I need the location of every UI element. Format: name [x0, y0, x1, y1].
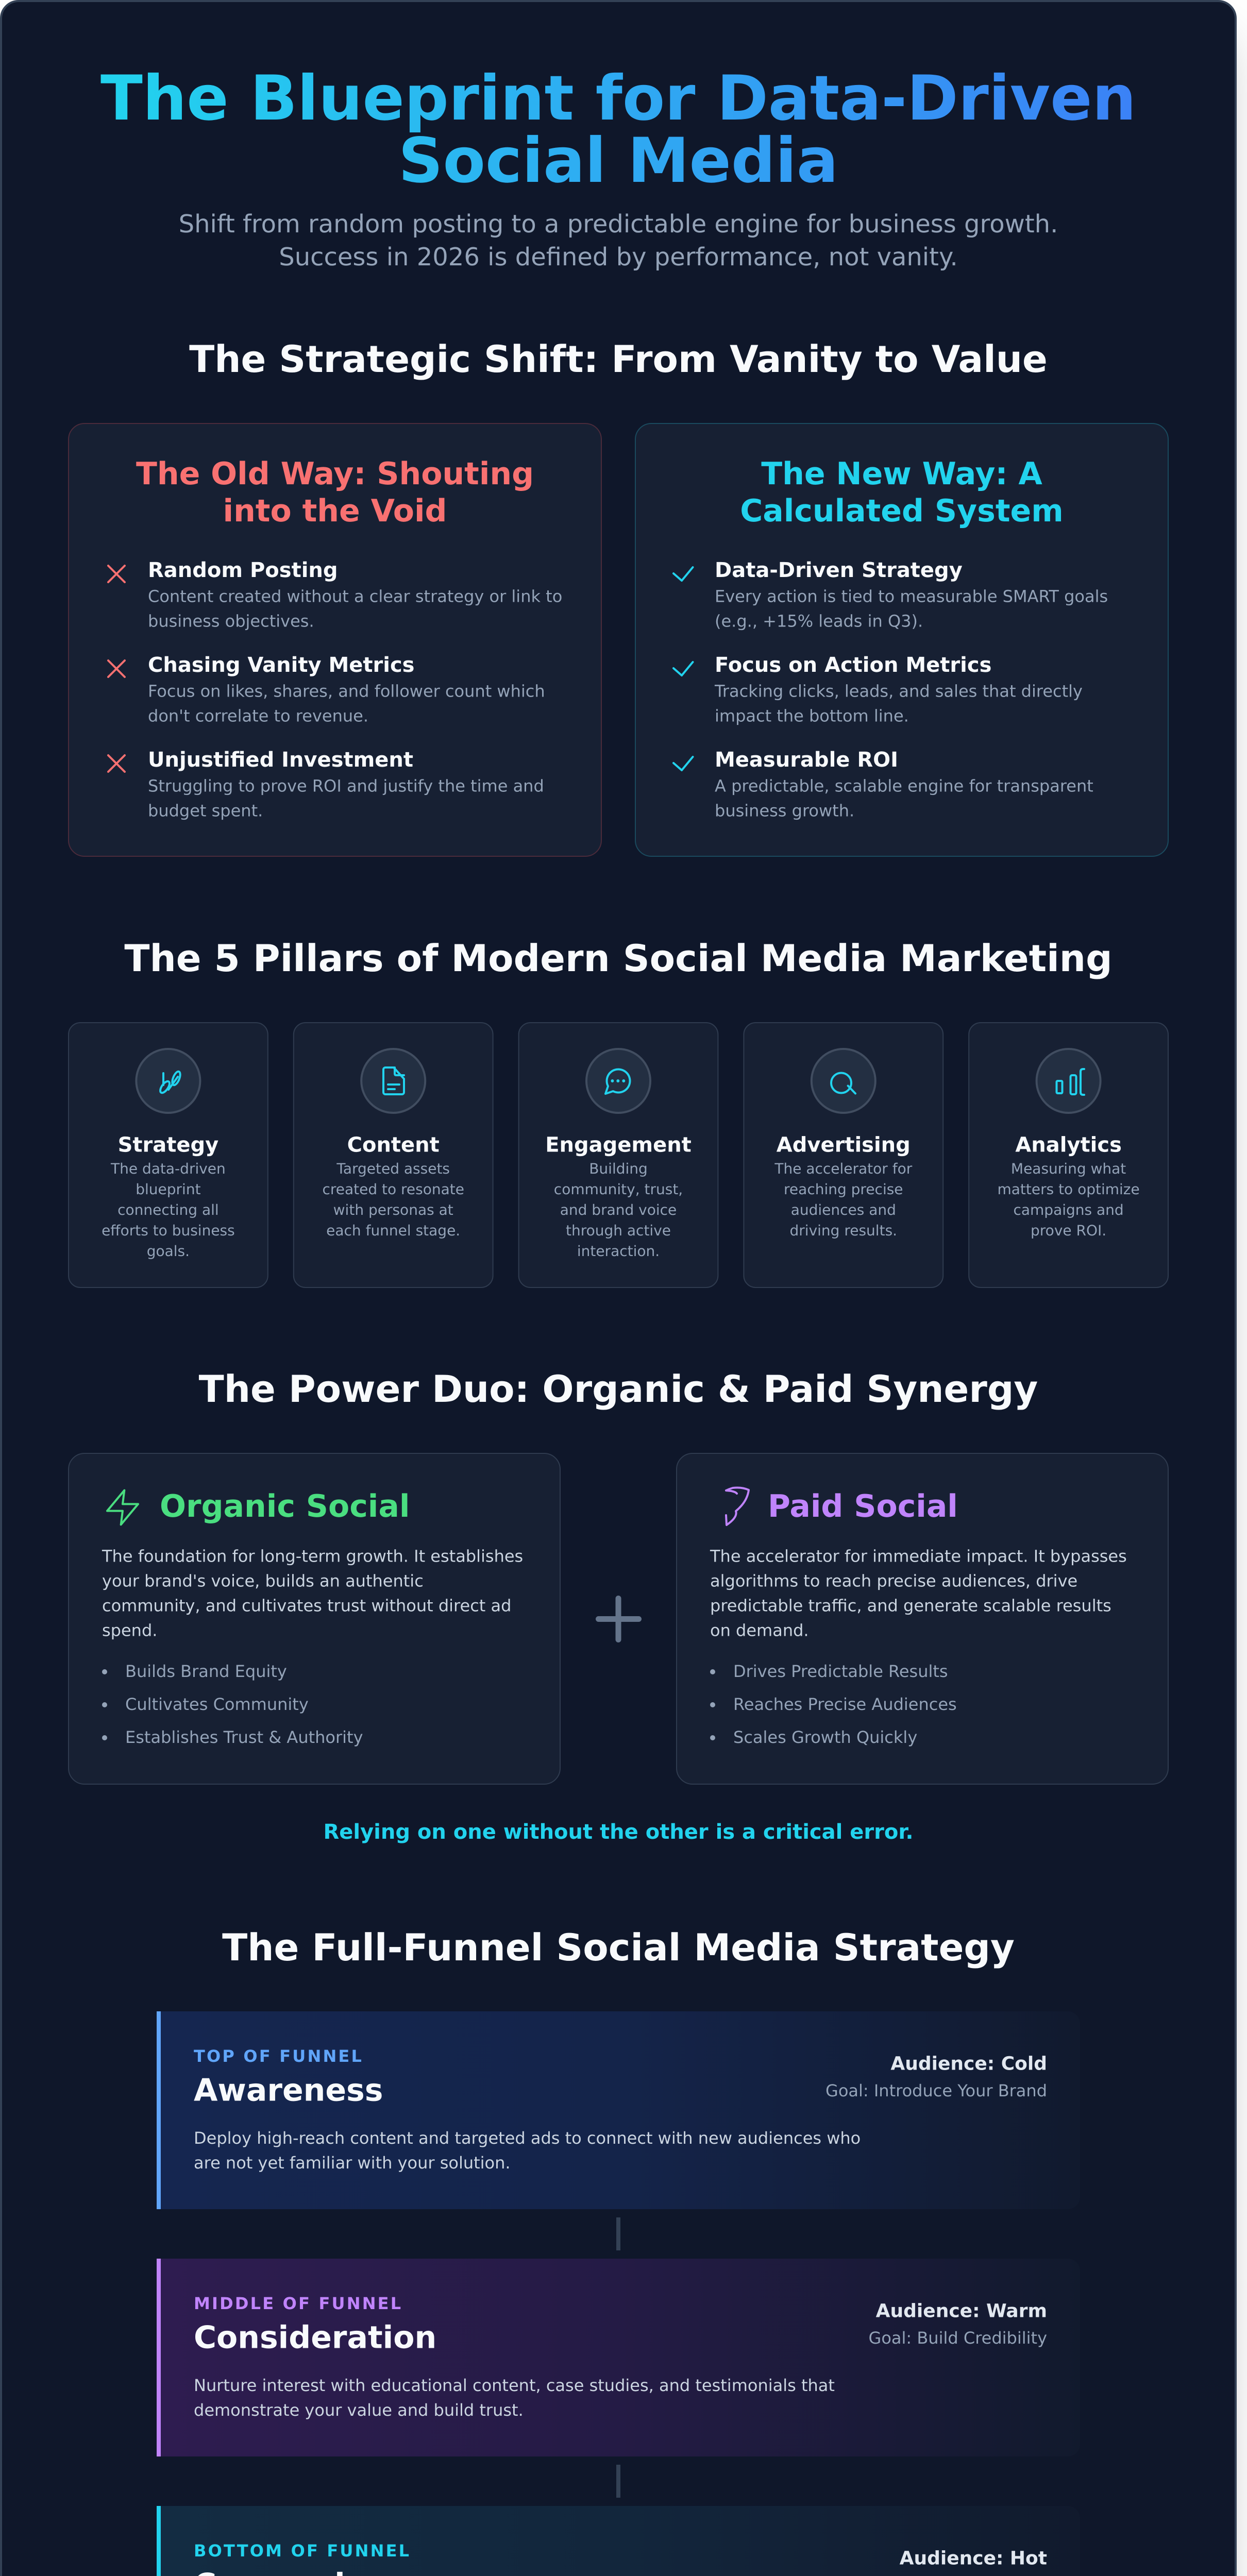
pillar text: engagement: Building — [589, 1160, 648, 1177]
callout: Relying on one without the other is a critical error. — [323, 1820, 914, 1844]
icon: cross 2 — [108, 660, 125, 677]
pillar text: advertising — [774, 1133, 913, 1239]
item: focus on action metrics: Focus on Action Metrics — [715, 653, 991, 677]
pillar text: content: created to resonate — [322, 1181, 464, 1198]
pillar text: engagement: Engagement — [545, 1133, 692, 1157]
panel: engagement pillar — [519, 1023, 718, 1287]
new way heading: The New Way: A — [761, 456, 1042, 492]
pillar text: analytics: prove ROI. — [1031, 1222, 1106, 1239]
panel: conversion stage — [157, 2506, 1080, 2576]
pillar text: strategy: efforts to business — [102, 1222, 235, 1239]
paid description: algorithms to reach precise audiences, drive — [710, 1571, 1077, 1591]
item: chasing vanity metrics: don't correlate to revenue. — [148, 706, 368, 725]
pillar text: engagement — [545, 1133, 692, 1260]
audience and goal: Audience: Hot — [900, 2548, 1047, 2569]
pillar text: advertising: driving results. — [790, 1222, 897, 1239]
pillar text: strategy: connecting all — [117, 1201, 219, 1218]
heading: strategic shift: The Strategic Shift: From Vanity to Value — [189, 337, 1048, 381]
stage description — [194, 2128, 861, 2173]
pillar text: engagement: and brand voice — [560, 1201, 677, 1218]
item: random posting: Content created without a clear strategy or link to — [148, 586, 562, 606]
stage description: demonstrate your value and build trust. — [194, 2400, 524, 2420]
paid description — [710, 1547, 1127, 1640]
pillar text: strategy: The data-driven — [110, 1160, 226, 1177]
icon: document — [383, 1067, 404, 1094]
paid description: on demand. — [710, 1621, 809, 1640]
paid heading: Paid Social — [768, 1488, 958, 1524]
audience and goal: Goal: Build Credibility — [869, 2328, 1047, 2348]
stage description — [194, 2376, 835, 2420]
item: random posting: Random Posting — [148, 558, 338, 582]
paid bullet list: Reaches Precise Audiences — [733, 1694, 957, 1714]
pillar text: advertising: audiences and — [791, 1201, 896, 1218]
icon: check 2 — [673, 662, 693, 675]
pillar text: content: Targeted assets — [336, 1160, 450, 1177]
item: focus on action metrics: impact the bottom line. — [715, 706, 909, 725]
organic bullet list — [102, 1662, 363, 1747]
new way heading — [740, 456, 1064, 529]
title: Social Media — [398, 125, 838, 197]
pillar text: advertising: The accelerator for — [774, 1160, 913, 1177]
item: unjustified investment: Struggling to prove ROI and justify the time and — [148, 776, 544, 795]
old way heading — [136, 456, 534, 529]
heading: five pillars: The 5 Pillars of Modern Social Media Marketing — [124, 937, 1113, 980]
icon: chat bubble — [605, 1069, 630, 1094]
organic description: your brand's voice, builds an authentic — [102, 1571, 424, 1591]
pillar text: strategy — [102, 1133, 235, 1260]
pillar text: analytics — [997, 1133, 1140, 1239]
stage label: TOP OF FUNNEL — [194, 2046, 363, 2066]
item: data-driven strategy: (e.g., +15% leads in Q3). — [715, 611, 923, 631]
arrow: connector 1 — [616, 2217, 620, 2250]
stage label: BOTTOM OF FUNNEL — [194, 2541, 411, 2561]
heading: power duo: The Power Duo: Organic & Paid Synergy — [199, 1367, 1038, 1411]
audience and goal — [825, 2054, 1047, 2100]
new way heading: Calculated System — [740, 493, 1064, 529]
icon: paid hook — [726, 1488, 749, 1525]
old way heading: The Old Way: Shouting — [136, 456, 534, 492]
item: data-driven strategy — [715, 558, 1108, 631]
panel: analytics pillar — [969, 1023, 1168, 1287]
pillar text: advertising: reaching precise — [784, 1181, 903, 1198]
pillar text: analytics: matters to optimize — [997, 1181, 1140, 1198]
icon: lightning — [107, 1490, 138, 1524]
organic bullet list: Establishes Trust & Authority — [125, 1727, 363, 1747]
pillar text: engagement: interaction. — [577, 1243, 660, 1260]
audience and goal — [843, 2548, 1047, 2576]
organic bullet list: Cultivates Community — [125, 1694, 309, 1714]
pillar text: strategy: goals. — [147, 1243, 190, 1260]
panel: consideration stage — [157, 2259, 1080, 2456]
arrow: connector 2 — [616, 2465, 620, 2498]
pillar text: analytics: campaigns and — [1013, 1201, 1124, 1218]
paid bullet list: Drives Predictable Results — [733, 1662, 948, 1681]
pillar text: analytics: Analytics — [1015, 1133, 1122, 1157]
item: measurable roi — [715, 748, 1093, 820]
organic heading: Organic Social — [160, 1488, 410, 1524]
panel: paid social — [677, 1453, 1168, 1784]
panel: awareness stage — [157, 2011, 1080, 2209]
paid bullet list — [710, 1662, 957, 1747]
pillar text: content: Content — [347, 1133, 440, 1157]
stage description: are not yet familiar with your solution. — [194, 2153, 511, 2173]
pillar text: strategy: blueprint — [136, 1181, 201, 1198]
icon: cross 3 — [108, 755, 125, 772]
item: data-driven strategy: Data-Driven Strategy — [715, 558, 963, 582]
item: random posting — [148, 558, 562, 631]
icon: strategy link — [159, 1071, 182, 1094]
pillar text: content: each funnel stage. — [326, 1222, 460, 1239]
item: unjustified investment: budget spent. — [148, 801, 263, 820]
icon: check 1 — [673, 567, 693, 581]
item: focus on action metrics — [714, 653, 1083, 725]
stage name: Awareness — [194, 2072, 383, 2108]
organic description: spend. — [102, 1621, 157, 1640]
pillar text: content: with personas at — [333, 1201, 453, 1218]
pillar text: content — [322, 1133, 464, 1239]
paid description: The accelerator for immediate impact. It bypasses — [710, 1547, 1127, 1566]
audience and goal — [869, 2301, 1047, 2348]
old way heading: into the Void — [223, 493, 447, 529]
pillar text: analytics: Measuring what — [1011, 1160, 1126, 1177]
pillar text: advertising: Advertising — [777, 1133, 911, 1157]
organic description — [102, 1547, 523, 1640]
stage label: MIDDLE OF FUNNEL — [194, 2294, 402, 2313]
item: measurable roi: Measurable ROI — [715, 748, 898, 772]
icon: cross 1 — [108, 566, 125, 582]
panel: content pillar — [294, 1023, 493, 1287]
panel: the new way — [635, 423, 1168, 856]
icon: check 3 — [673, 757, 693, 770]
panel: organic social — [69, 1453, 560, 1784]
stage description: Nurture interest with educational content, case studies, and testimonials that — [194, 2376, 835, 2395]
subtitle — [179, 210, 1058, 272]
paid description: predictable traffic, and generate scalable results — [710, 1596, 1111, 1616]
pillar text: strategy: Strategy — [118, 1133, 218, 1157]
audience and goal: Goal: Introduce Your Brand — [825, 2081, 1047, 2100]
audience and goal: Audience: Cold — [890, 2054, 1047, 2074]
item: chasing vanity metrics — [148, 653, 545, 725]
item: unjustified investment — [148, 748, 544, 820]
item: unjustified investment: Unjustified Investment — [148, 748, 413, 772]
subtitle: Shift from random posting to a predictable engine for business growth. — [179, 210, 1058, 239]
stage description: Deploy high-reach content and targeted ads to connect with new audiences who — [194, 2128, 861, 2148]
title — [100, 63, 1136, 197]
item: data-driven strategy: Every action is tied to measurable SMART goals — [715, 586, 1108, 606]
icon: plus — [599, 1598, 639, 1639]
icon: bar chart — [1056, 1069, 1084, 1095]
organic description: The foundation for long-term growth. It establishes — [102, 1547, 523, 1566]
organic bullet list: Builds Brand Equity — [125, 1662, 287, 1681]
heading: full funnel: The Full-Funnel Social Media Strategy — [222, 1926, 1015, 1969]
paid bullet list: Scales Growth Quickly — [733, 1727, 917, 1747]
item: focus on action metrics: Tracking clicks, leads, and sales that directly — [714, 681, 1083, 701]
item: measurable roi: business growth. — [715, 801, 854, 820]
pillar text: engagement: through active — [566, 1222, 671, 1239]
title: The Blueprint for Data-Driven — [100, 63, 1136, 134]
audience and goal: Audience: Warm — [876, 2301, 1047, 2321]
organic description: community, and cultivates trust without direct ad — [102, 1596, 511, 1616]
item: chasing vanity metrics: Chasing Vanity Metrics — [148, 653, 414, 677]
item: random posting: business objectives. — [148, 611, 314, 631]
stage name: Consideration — [194, 2319, 436, 2355]
subtitle: Success in 2026 is defined by performance, not vanity. — [279, 243, 958, 272]
icon: magnifier — [831, 1073, 855, 1093]
panel: advertising pillar — [744, 1023, 943, 1287]
item: measurable roi: A predictable, scalable engine for transparent — [715, 776, 1093, 795]
panel: strategy pillar — [69, 1023, 268, 1287]
panel: the old way — [69, 423, 601, 856]
pillar text: engagement: community, trust, — [554, 1181, 683, 1198]
item: chasing vanity metrics: Focus on likes, shares, and follower count which — [148, 681, 545, 701]
